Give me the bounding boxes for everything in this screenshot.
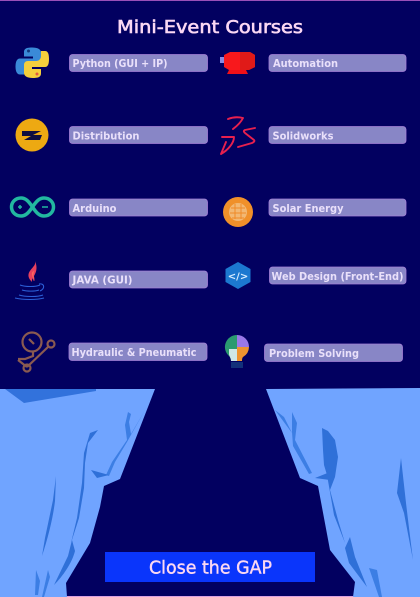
label: solar energy	[269, 199, 406, 216]
icon: distribution	[16, 118, 48, 152]
label: distribution	[70, 126, 208, 144]
icon: automation motor	[220, 52, 255, 74]
icon: problem solving	[225, 335, 249, 368]
label: automation: Automation	[273, 57, 338, 70]
label: hydraulic: Hydraulic & Pneumatic	[72, 346, 196, 359]
button: close the gap: Close the GAP	[149, 558, 272, 578]
label: python	[70, 54, 208, 72]
label: solidworks: Solidworks	[272, 130, 334, 142]
label: problem solving	[264, 344, 402, 362]
icon: hydraulic	[18, 332, 54, 372]
label: solidworks	[269, 126, 406, 144]
icon: web design	[226, 262, 250, 289]
title: Mini-Event Courses	[117, 18, 303, 38]
label: problem solving: Problem Solving	[269, 347, 359, 360]
left cliff	[0, 389, 155, 597]
icon: solidworks	[221, 117, 255, 154]
icon: arduino	[12, 198, 54, 216]
label: automation	[269, 54, 406, 72]
label: web design: Web Design (Front-End)	[272, 270, 404, 283]
label: distribution: Distribution	[72, 130, 140, 142]
right cliff	[266, 388, 420, 597]
icon: web design: </>	[228, 272, 248, 282]
label: solar energy: Solar Energy	[272, 202, 344, 215]
label: arduino: Arduino	[72, 202, 117, 215]
label: python: Python (GUI + IP)	[72, 57, 168, 70]
label: arduino	[70, 199, 208, 216]
icon: python	[16, 48, 49, 78]
label: java: JAVA (GUI)	[72, 274, 132, 286]
icon: solar energy	[223, 197, 253, 227]
label: java	[70, 271, 208, 288]
button: close the gap	[105, 552, 315, 582]
icon: java	[15, 261, 44, 300]
